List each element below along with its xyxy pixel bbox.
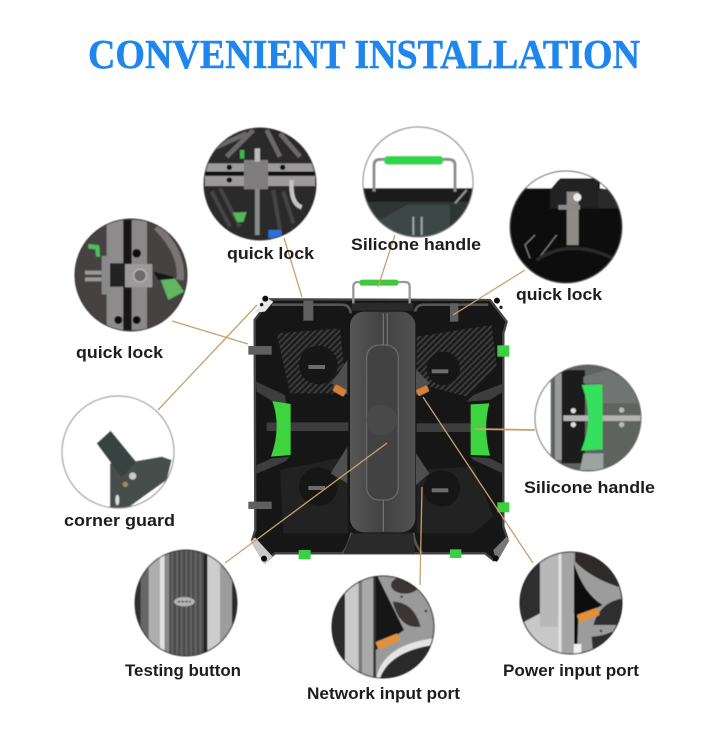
detail: network input port bbox=[332, 573, 435, 680]
detail: right silicone handle bbox=[533, 363, 644, 473]
housing wings bbox=[331, 360, 430, 485]
leader lines bbox=[158, 235, 535, 585]
label: quick lock left: quick lock bbox=[76, 343, 164, 362]
label: quick lock top: quick lock bbox=[227, 244, 315, 263]
detail: corner guard bbox=[60, 395, 175, 510]
carbon fibre texture bbox=[277, 325, 497, 397]
detail: top quick lock bbox=[200, 125, 320, 245]
detail: top silicone handle bbox=[360, 125, 477, 240]
detail: right quick lock bbox=[508, 170, 623, 285]
label: testing button: Testing button bbox=[125, 661, 241, 680]
cross bars bbox=[267, 422, 473, 432]
ring bbox=[62, 396, 174, 508]
title: CONVENIENT INSTALLATION bbox=[88, 31, 640, 77]
inner bay rims bbox=[272, 305, 488, 553]
ring bbox=[332, 576, 434, 678]
detail: testing button bbox=[133, 548, 240, 658]
label: corner guard: corner guard bbox=[64, 511, 175, 530]
top mounting rail bbox=[352, 303, 413, 311]
label: power input port: Power input port bbox=[503, 661, 639, 680]
label: silicone handle top: Silicone handle bbox=[351, 235, 481, 254]
ring bbox=[363, 127, 473, 237]
detail: power input port bbox=[518, 550, 623, 658]
ring bbox=[204, 128, 316, 240]
label: network input port: Network input port bbox=[307, 684, 460, 703]
central housing bbox=[350, 312, 415, 532]
carry handle bbox=[353, 280, 410, 303]
ring bbox=[510, 171, 622, 283]
LED cabinet rear view bbox=[248, 280, 509, 564]
bottom mounting rail bbox=[343, 533, 415, 553]
quick locks bbox=[248, 301, 458, 509]
round module seats bbox=[289, 346, 474, 507]
detail: left quick lock bbox=[73, 218, 188, 333]
ring bbox=[135, 550, 237, 656]
ring bbox=[75, 219, 187, 331]
cabinet body bbox=[252, 299, 507, 562]
label: silicone handle right: Silicone handle bbox=[524, 478, 655, 497]
green side handles bbox=[271, 401, 490, 457]
orange ports bbox=[332, 384, 430, 397]
ring bbox=[535, 365, 641, 471]
label: quick lock right: quick lock bbox=[516, 285, 603, 304]
module latches bbox=[308, 365, 448, 492]
lower bay shading bbox=[280, 457, 493, 533]
ring bbox=[520, 552, 622, 654]
green clips bbox=[299, 345, 509, 559]
corner guards bbox=[251, 296, 509, 564]
side arms bbox=[256, 382, 503, 474]
